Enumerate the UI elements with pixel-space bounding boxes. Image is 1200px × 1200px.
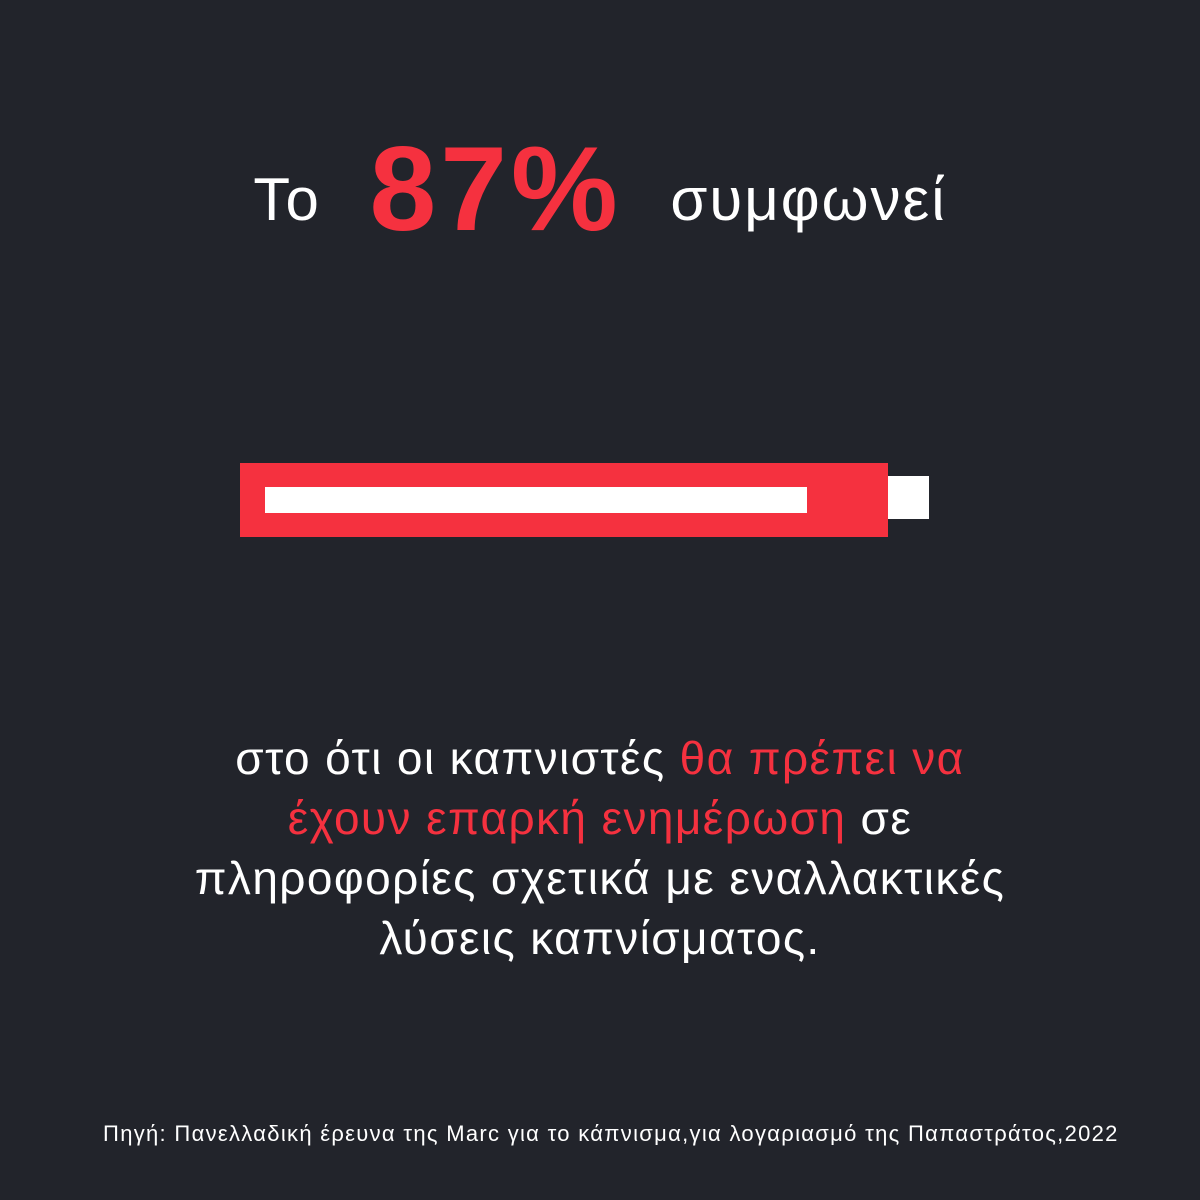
body text: πληροφορίες σχετικά με εναλλακτικές [195,852,1005,904]
footer source: Πηγή: Πανελλαδική έρευνα της Marc για το κάπνισμα,για λογαριασμό της Παπαστράτος,2022 [103,1121,1119,1146]
body text [195,732,1005,964]
body text: έχουν επαρκή ενημέρωση σε [288,792,912,844]
bar fill white [265,487,807,513]
bar cap [888,476,929,519]
title: Το 87% συμφωνεί [253,122,947,256]
icon: battery bar [240,463,929,537]
body text: στο ότι οι καπνιστές θα πρέπει να [235,732,965,784]
body text: λύσεις καπνίσματος. [379,912,821,964]
bar outer red [240,463,888,537]
